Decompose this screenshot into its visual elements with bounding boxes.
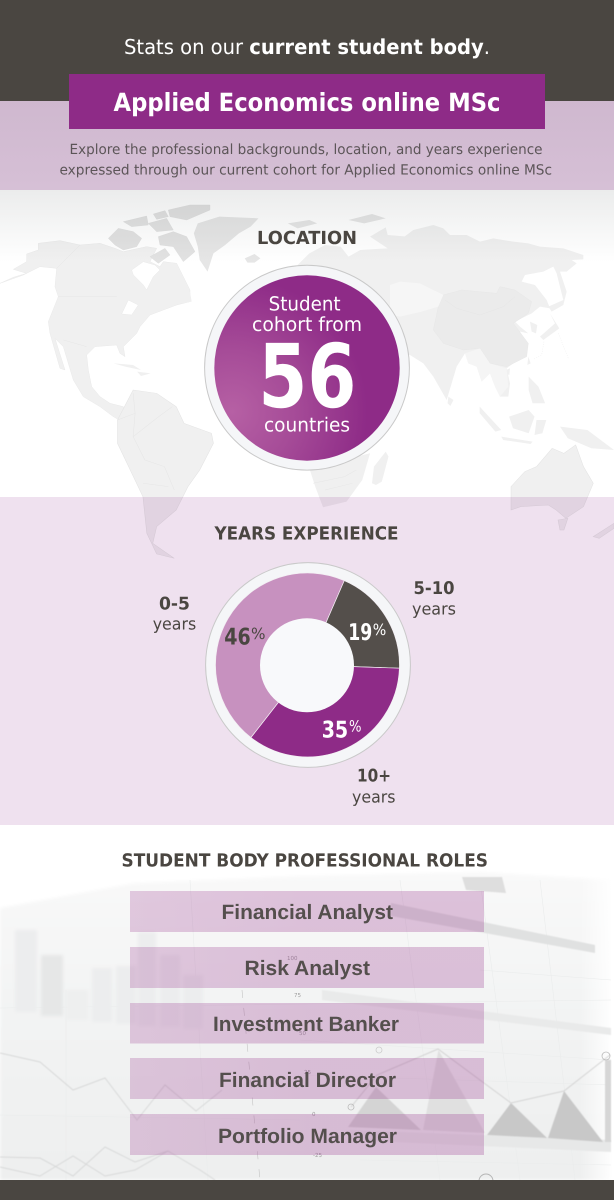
Mongolia border xyxy=(445,297,515,315)
location stat circle: countries xyxy=(264,414,350,436)
role: Financial Analyst xyxy=(130,891,484,932)
Madagascar xyxy=(372,452,388,485)
intro text xyxy=(60,142,552,178)
faded chart backdrop: 25 xyxy=(304,1069,311,1076)
value: 46%: 46 xyxy=(224,624,251,650)
percent sign 46: % xyxy=(251,625,266,643)
value: 35%: 35 xyxy=(322,717,348,743)
footer bar xyxy=(0,1180,614,1200)
label: 10+ years xyxy=(352,767,396,806)
intro text: expressed through our current cohort for Applied Economics online MSc xyxy=(60,162,552,178)
islands of south-east Asia xyxy=(480,377,614,450)
label: 5-10 years xyxy=(412,579,456,618)
role: Financial Analyst: Financial Analyst xyxy=(222,901,393,924)
title banner: Applied Economics online MSc xyxy=(114,88,500,117)
Greenland, Iceland, arctic xyxy=(194,214,386,272)
Africa south xyxy=(309,453,370,507)
Europe and Middle East xyxy=(298,227,415,350)
role: Investment Banker: Investment Banker xyxy=(213,1013,399,1036)
faded chart backdrop: -25 xyxy=(313,1152,322,1159)
label: 5-10 years: years xyxy=(412,600,456,618)
Indochina xyxy=(465,348,508,397)
percent sign 35: % xyxy=(349,718,362,736)
title banner xyxy=(69,74,545,129)
faded chart backdrop: 50 xyxy=(299,1030,306,1037)
faded chart backdrop: 100 xyxy=(287,955,298,962)
role: Risk Analyst xyxy=(130,947,484,988)
Asia xyxy=(400,225,583,400)
location stat circle: Student xyxy=(269,292,341,316)
role: Financial Director: Financial Director xyxy=(219,1069,396,1092)
role: Investment Banker xyxy=(130,1003,484,1044)
faded chart backdrop xyxy=(0,870,614,1188)
role: Portfolio Manager: Portfolio Manager xyxy=(218,1125,397,1148)
label: 0-5 years: years xyxy=(153,614,196,634)
header bar xyxy=(0,0,614,101)
lilac intro band xyxy=(0,101,614,190)
panel: years experience background xyxy=(0,497,614,825)
label: 10+ years: 10+ xyxy=(357,767,391,787)
location stat circle: 56 xyxy=(258,325,356,428)
faded chart backdrop: 75 xyxy=(294,992,301,999)
label: 0-5 years: 0-5 xyxy=(159,594,190,614)
China and Mongolia xyxy=(433,287,532,367)
heading: location: LOCATION xyxy=(257,228,357,249)
panel: location background xyxy=(0,190,614,497)
Japan and Korea xyxy=(506,313,559,375)
location stat circle xyxy=(205,265,409,470)
label: 10+ years: years xyxy=(352,788,396,806)
panel: professional roles background xyxy=(0,825,614,1188)
headline: Stats on our current student body. xyxy=(124,35,490,59)
label: 5-10 years: 5-10 xyxy=(414,579,454,599)
location stat circle: cohort from xyxy=(252,313,362,336)
Kazakhstan xyxy=(390,282,443,317)
faded chart backdrop: 0 xyxy=(312,1111,316,1118)
Australia xyxy=(511,445,614,538)
percent sign 19: % xyxy=(373,621,386,639)
donut chart: years experience xyxy=(206,563,410,767)
heading: years experience: YEARS EXPERIENCE xyxy=(214,524,398,544)
heading: professional roles: STUDENT BODY PROFESSIONAL ROLES xyxy=(122,850,488,872)
Sri Lanka xyxy=(448,397,453,406)
value: 19%: 19 xyxy=(348,620,372,646)
world map xyxy=(0,205,614,558)
South America xyxy=(117,390,213,558)
label: 0-5 years xyxy=(153,594,196,634)
role: Risk Analyst: Risk Analyst xyxy=(244,957,370,980)
role: Portfolio Manager xyxy=(130,1114,484,1155)
location top gradient xyxy=(0,190,614,262)
intro text: Explore the professional backgrounds, location, and years experience xyxy=(70,142,542,158)
Caribbean xyxy=(114,363,151,376)
role: Financial Director xyxy=(130,1058,484,1099)
